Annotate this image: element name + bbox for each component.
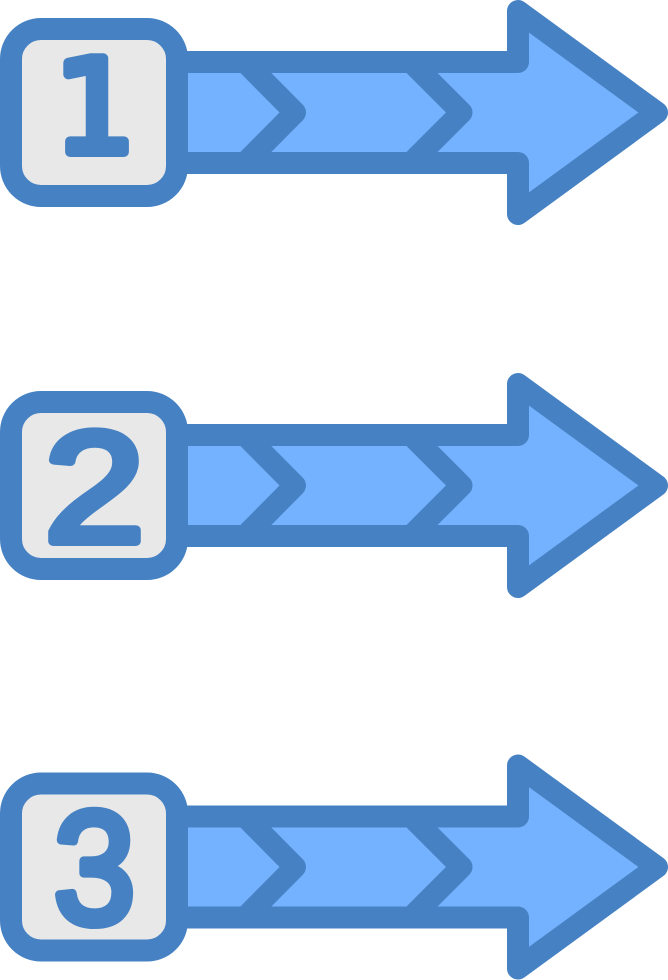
number 1: 1: [54, 34, 136, 183]
number 3 badge: [11, 784, 177, 950]
arrow 2 first chevron: [245, 435, 295, 536]
arrow 1 body: [177, 11, 657, 214]
arrow 3 body: [177, 766, 657, 968]
arrow 1 second chevron: [411, 62, 462, 163]
number 2 badge: [11, 402, 177, 569]
number 2: 2: [44, 400, 145, 575]
arrow 3 first chevron: [245, 816, 295, 918]
arrow 1 first chevron: [245, 62, 295, 163]
step 1 row: [11, 11, 657, 214]
number 3: 3: [54, 778, 135, 957]
number 1 badge: [11, 29, 177, 196]
arrow 2 second chevron: [411, 435, 462, 536]
step 2 row: [11, 384, 657, 587]
step 3 row: [11, 766, 657, 968]
arrow 3 second chevron: [411, 816, 462, 918]
arrow 2 body: [177, 384, 657, 587]
